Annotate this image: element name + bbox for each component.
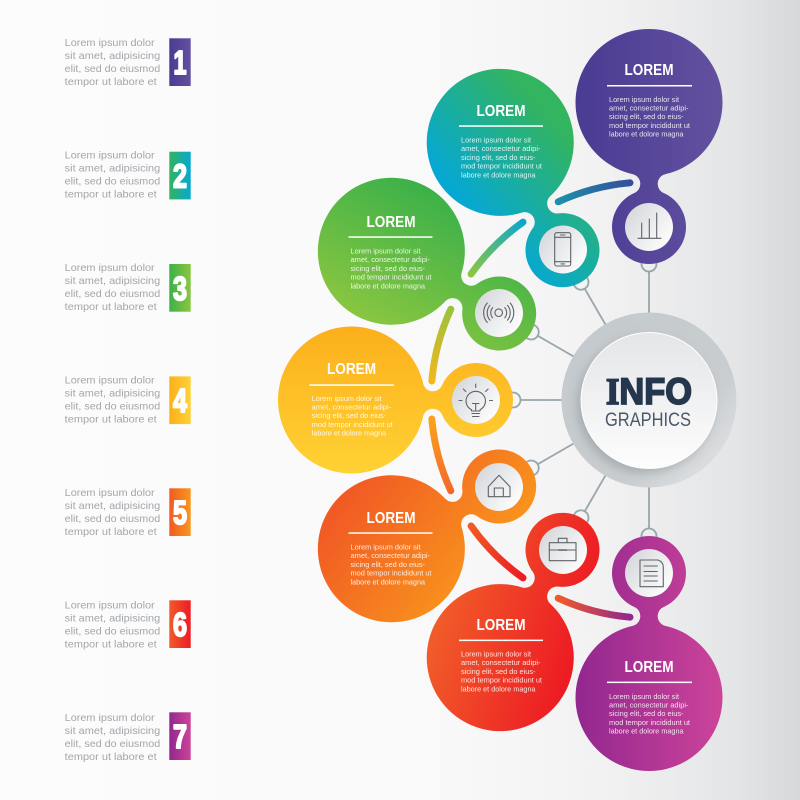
node shape: green xyxy=(291,151,568,396)
text block: red: labore et dolore magna xyxy=(461,684,536,693)
legend text 3: tempor ut labore et xyxy=(65,302,157,313)
text block: red: LOREM xyxy=(476,617,526,634)
legend text 3: sit amet, adipisicing xyxy=(65,276,160,287)
legend text 5: Lorem ipsum dolor xyxy=(65,488,155,499)
connector: yellow node xyxy=(506,392,570,408)
legend text 2 xyxy=(65,151,160,201)
legend text 4: sit amet, adipisicing xyxy=(65,388,160,400)
legend text 2: tempor ut labore et xyxy=(65,190,157,201)
text block: green: Lorem ipsum dolor sit xyxy=(350,246,420,256)
text block: yellow: LOREM xyxy=(327,361,376,378)
text block: magenta xyxy=(607,659,692,736)
legend text 5: sit amet, adipisicing xyxy=(65,501,160,512)
icon: light bulb xyxy=(452,376,500,424)
legend text 4: Lorem ipsum dolor xyxy=(65,376,155,386)
text block: orange: mod tempor incididunt ut xyxy=(350,569,432,578)
text block: teal: amet, consectetur adipi- xyxy=(461,144,541,153)
icon: house xyxy=(475,463,523,511)
text block: red xyxy=(459,617,543,693)
central hub xyxy=(562,312,736,488)
text block: teal: LOREM xyxy=(476,103,526,120)
icon: document xyxy=(625,549,673,597)
legend text 1: elit, sed do eiusmod xyxy=(65,64,160,75)
text block: orange: labore et dolore magna xyxy=(350,577,425,586)
text block: green: LOREM xyxy=(366,214,416,231)
legend text 2: Lorem ipsum dolor xyxy=(65,151,155,162)
connector lines from hub to nodes xyxy=(506,256,656,544)
hub title: INFO xyxy=(606,371,692,413)
legend item 2 xyxy=(65,151,191,201)
text block: purple: LOREM xyxy=(624,62,674,79)
text block: yellow xyxy=(309,361,394,438)
legend text 4: tempor ut labore et xyxy=(65,414,157,426)
arc: yellow to green xyxy=(432,309,451,381)
connector: magenta node xyxy=(642,479,656,544)
node shape: purple xyxy=(576,29,722,264)
legend text 4: elit, sed do eiusmod xyxy=(65,402,160,412)
text block: green xyxy=(348,214,432,290)
icon: bar chart xyxy=(625,203,673,251)
arc: teal to purple xyxy=(558,183,630,202)
legend text 7: Lorem ipsum dolor xyxy=(65,713,155,724)
legend item 6 xyxy=(65,600,191,650)
text block: green: amet, consectetur adipi- xyxy=(350,255,431,264)
text block: magenta: sicing elit, sed do eius- xyxy=(609,709,684,718)
number badge 5: 5 xyxy=(173,494,187,531)
legend text 5: tempor ut labore et xyxy=(65,527,157,538)
legend item 4 xyxy=(65,376,191,426)
text block: purple: amet, consectetur adipi- xyxy=(609,104,689,112)
icon: smartphone xyxy=(539,226,587,274)
node shape: orange xyxy=(291,404,568,649)
legend text 2: sit amet, adipisicing xyxy=(65,164,160,175)
node shape: red xyxy=(400,481,645,758)
text block: purple xyxy=(607,62,692,139)
text block: green: labore et dolore magna xyxy=(350,281,425,290)
text block: teal: labore et dolore magna xyxy=(461,170,536,179)
legend text 6 xyxy=(65,600,160,650)
legend item 5 xyxy=(65,488,191,538)
hub title xyxy=(605,371,692,431)
text block: green: sicing elit, sed do eius- xyxy=(350,264,426,273)
number badge 1: 1 xyxy=(174,44,186,81)
legend text 7: elit, sed do eiusmod xyxy=(65,739,160,750)
text block: orange: sicing elit, sed do eius- xyxy=(350,560,426,569)
text block: magenta: Lorem ipsum dolor sit xyxy=(609,692,679,701)
legend text 3: Lorem ipsum dolor xyxy=(65,263,155,274)
number badge 6: 6 xyxy=(173,606,187,643)
arc: green to teal xyxy=(471,222,523,274)
legend text 3: elit, sed do eiusmod xyxy=(65,289,160,300)
connector: green node xyxy=(521,322,584,367)
legend text 1: sit amet, adipisicing xyxy=(65,51,160,62)
connector: teal node xyxy=(571,272,616,335)
text block: orange: LOREM xyxy=(366,510,416,527)
text block: green: mod tempor incididunt ut xyxy=(350,273,432,282)
legend text 5 xyxy=(65,488,160,538)
legend item 3 xyxy=(65,263,191,313)
text block: red: mod tempor incididunt ut xyxy=(461,676,542,685)
text block: magenta: LOREM xyxy=(624,659,674,676)
text block: teal: mod tempor incididunt ut xyxy=(461,162,542,171)
text block: orange xyxy=(348,510,432,586)
text block: teal xyxy=(459,103,543,179)
legend text 1: tempor ut labore et xyxy=(65,77,157,88)
hub title: GRAPHICS xyxy=(605,409,691,431)
text block: teal: sicing elit, sed do eius- xyxy=(461,153,536,162)
text block: red: Lorem ipsum dolor sit xyxy=(461,650,531,658)
text block: teal: Lorem ipsum dolor sit xyxy=(461,136,531,144)
text block: red: amet, consectetur adipi- xyxy=(461,658,541,667)
text block: magenta: amet, consectetur adipi- xyxy=(609,700,689,710)
legend text 6: elit, sed do eiusmod xyxy=(65,626,160,638)
text block: magenta: mod tempor incididunt ut xyxy=(609,718,690,727)
connector: orange node xyxy=(521,433,584,478)
text block: yellow: labore et dolore magna xyxy=(312,429,386,438)
node shape: teal xyxy=(400,42,645,319)
connector: purple node xyxy=(642,256,656,321)
legend text 1: Lorem ipsum dolor xyxy=(65,38,155,49)
icon: briefcase xyxy=(539,526,587,574)
legend text 7: sit amet, adipisicing xyxy=(65,726,160,737)
text block: purple: sicing elit, sed do eius- xyxy=(609,112,684,121)
legend text 7 xyxy=(65,713,160,763)
text block: yellow: amet, consectetur adipi- xyxy=(312,402,392,412)
legend text 6: tempor ut labore et xyxy=(65,640,157,650)
text block: purple: mod tempor incididunt ut xyxy=(609,121,690,130)
icon: wireless signal xyxy=(475,289,523,337)
legend item 7 xyxy=(65,712,191,763)
arc: red to magenta xyxy=(558,598,630,617)
legend text 1 xyxy=(65,38,160,88)
number badge 4: 4 xyxy=(173,382,187,419)
text block: yellow: Lorem ipsum dolor sit xyxy=(312,394,382,403)
text block: purple: Lorem ipsum dolor sit xyxy=(609,95,679,104)
text block: yellow: mod tempor incididunt ut xyxy=(312,420,393,429)
text block: orange: amet, consectetur adipi- xyxy=(350,551,431,560)
legend text 6: Lorem ipsum dolor xyxy=(65,600,155,612)
legend item 1 xyxy=(65,38,191,88)
legend text 2: elit, sed do eiusmod xyxy=(65,177,160,188)
text block: yellow: sicing elit, sed do eius- xyxy=(312,411,387,420)
node shape: magenta xyxy=(576,536,722,771)
number badge 2: 2 xyxy=(173,158,187,194)
text block: magenta: labore et dolore magna xyxy=(609,727,684,736)
connector: red node xyxy=(571,465,616,528)
node shape: yellow xyxy=(278,326,513,474)
legend text 3 xyxy=(65,263,160,313)
arc: orange to red xyxy=(471,526,523,578)
text block: red: sicing elit, sed do eius- xyxy=(461,667,536,676)
legend text 6: sit amet, adipisicing xyxy=(65,614,160,624)
number badge 7: 7 xyxy=(173,718,187,755)
legend text 7: tempor ut labore et xyxy=(65,752,157,763)
legend text 5: elit, sed do eiusmod xyxy=(65,514,160,525)
text block: orange: Lorem ipsum dolor sit xyxy=(350,542,420,552)
text block: purple: labore et dolore magna xyxy=(609,130,684,139)
legend text 4 xyxy=(65,376,160,426)
number badge 3: 3 xyxy=(173,270,187,307)
arc: yellow to orange xyxy=(432,419,451,491)
